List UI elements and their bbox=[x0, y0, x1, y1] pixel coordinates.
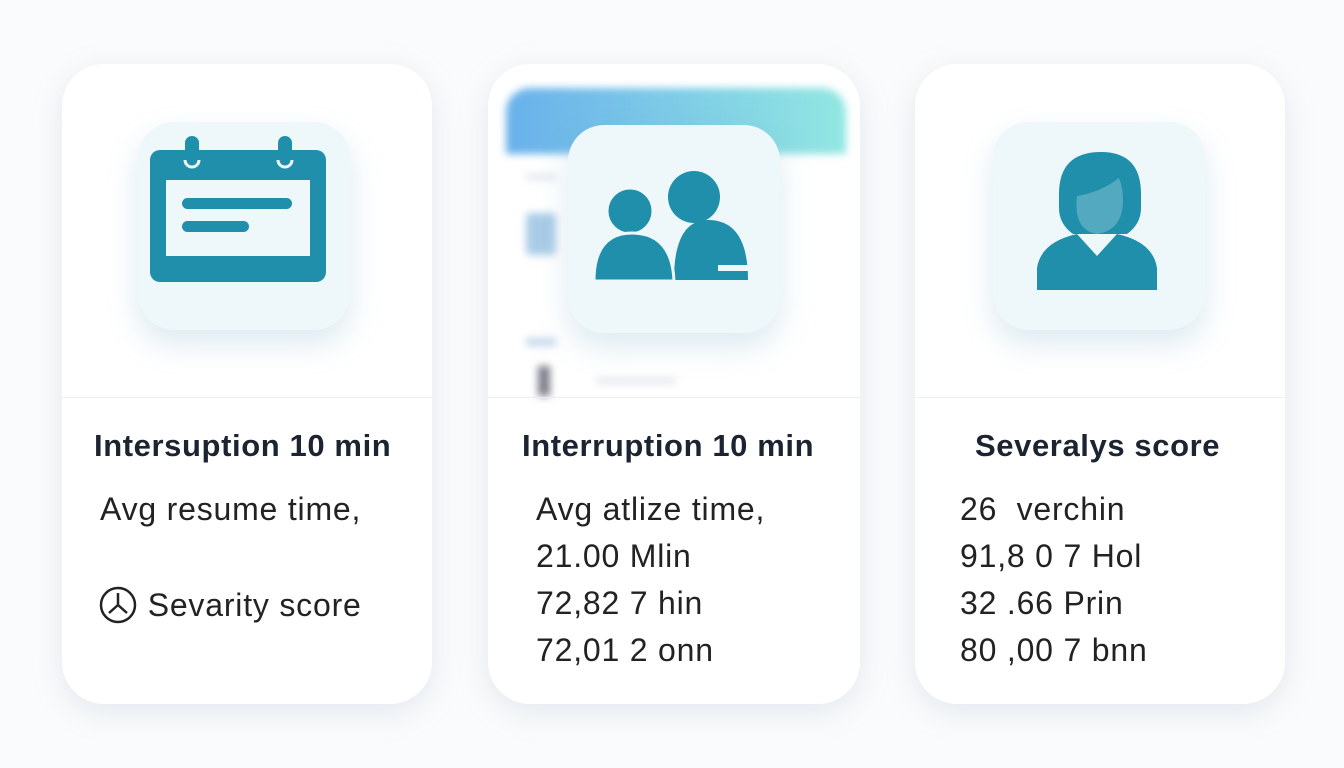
icon: calendar tile bbox=[138, 122, 350, 330]
text block: values: 26 verchin bbox=[960, 491, 1125, 527]
text block: values: 91,8 0 7 Hol bbox=[960, 538, 1142, 574]
text block: Avg resume time, bbox=[100, 491, 361, 527]
text block: values: 72,82 7 hin bbox=[536, 585, 703, 621]
panel: card 1 bbox=[62, 64, 432, 704]
panel: card 3 bbox=[915, 64, 1285, 704]
blurred dashboard background bbox=[500, 82, 852, 402]
text block: values bbox=[536, 491, 765, 668]
icon: person tile bbox=[993, 122, 1205, 330]
panel: card 2 bbox=[488, 64, 860, 704]
text block: values bbox=[960, 491, 1148, 668]
heading: Severalys score bbox=[975, 428, 1220, 463]
icon: people tile bbox=[568, 125, 780, 333]
heading: Intersuption 10 min bbox=[94, 428, 391, 463]
text block: values: 72,01 2 onn bbox=[536, 632, 714, 668]
heading: Interruption 10 min bbox=[522, 428, 814, 463]
text block: values: 21.00 Mlin bbox=[536, 538, 692, 574]
text block: values: 32 .66 Prin bbox=[960, 585, 1124, 621]
icon + severity label: Sevarity score bbox=[148, 587, 362, 623]
text block: values: 80 ,00 7 bnn bbox=[960, 632, 1148, 668]
text block: values: Avg atlize time, bbox=[536, 491, 765, 527]
